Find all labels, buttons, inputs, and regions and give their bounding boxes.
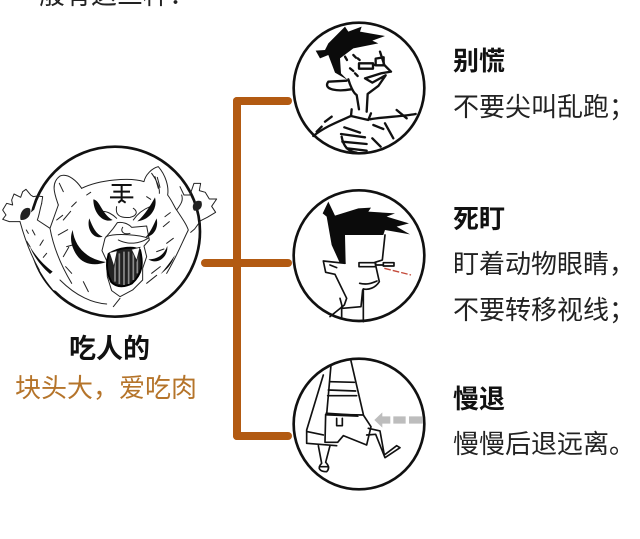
icon: panicking man: [294, 23, 424, 153]
text: stare at the eyes: 盯着动物眼睛，: [453, 249, 635, 279]
text: slowly back away: 慢慢后退远离。: [453, 429, 635, 459]
heading: don't panic: 别慌: [453, 46, 505, 76]
left paw: [3, 189, 43, 222]
forehead mark: [110, 185, 133, 203]
tiger paw pads: [20, 201, 202, 220]
icon: man staring: [294, 190, 424, 322]
icon: man backing away: [294, 359, 424, 489]
label: man eating type: 吃人的: [69, 334, 150, 364]
text: don't scream: 不要尖叫乱跑；: [453, 92, 635, 122]
heading: stare: 死盯: [453, 204, 505, 234]
label: description: 块头大，爱吃肉: [15, 373, 197, 403]
connector tree: [205, 101, 288, 436]
heading: back away: 慢退: [453, 384, 505, 414]
tiger mouth: [107, 248, 142, 286]
icon: roaring tiger in circle: [3, 147, 217, 317]
text: don't look away: 不要转移视线；: [453, 295, 635, 325]
tiger black stripes: [29, 197, 175, 274]
